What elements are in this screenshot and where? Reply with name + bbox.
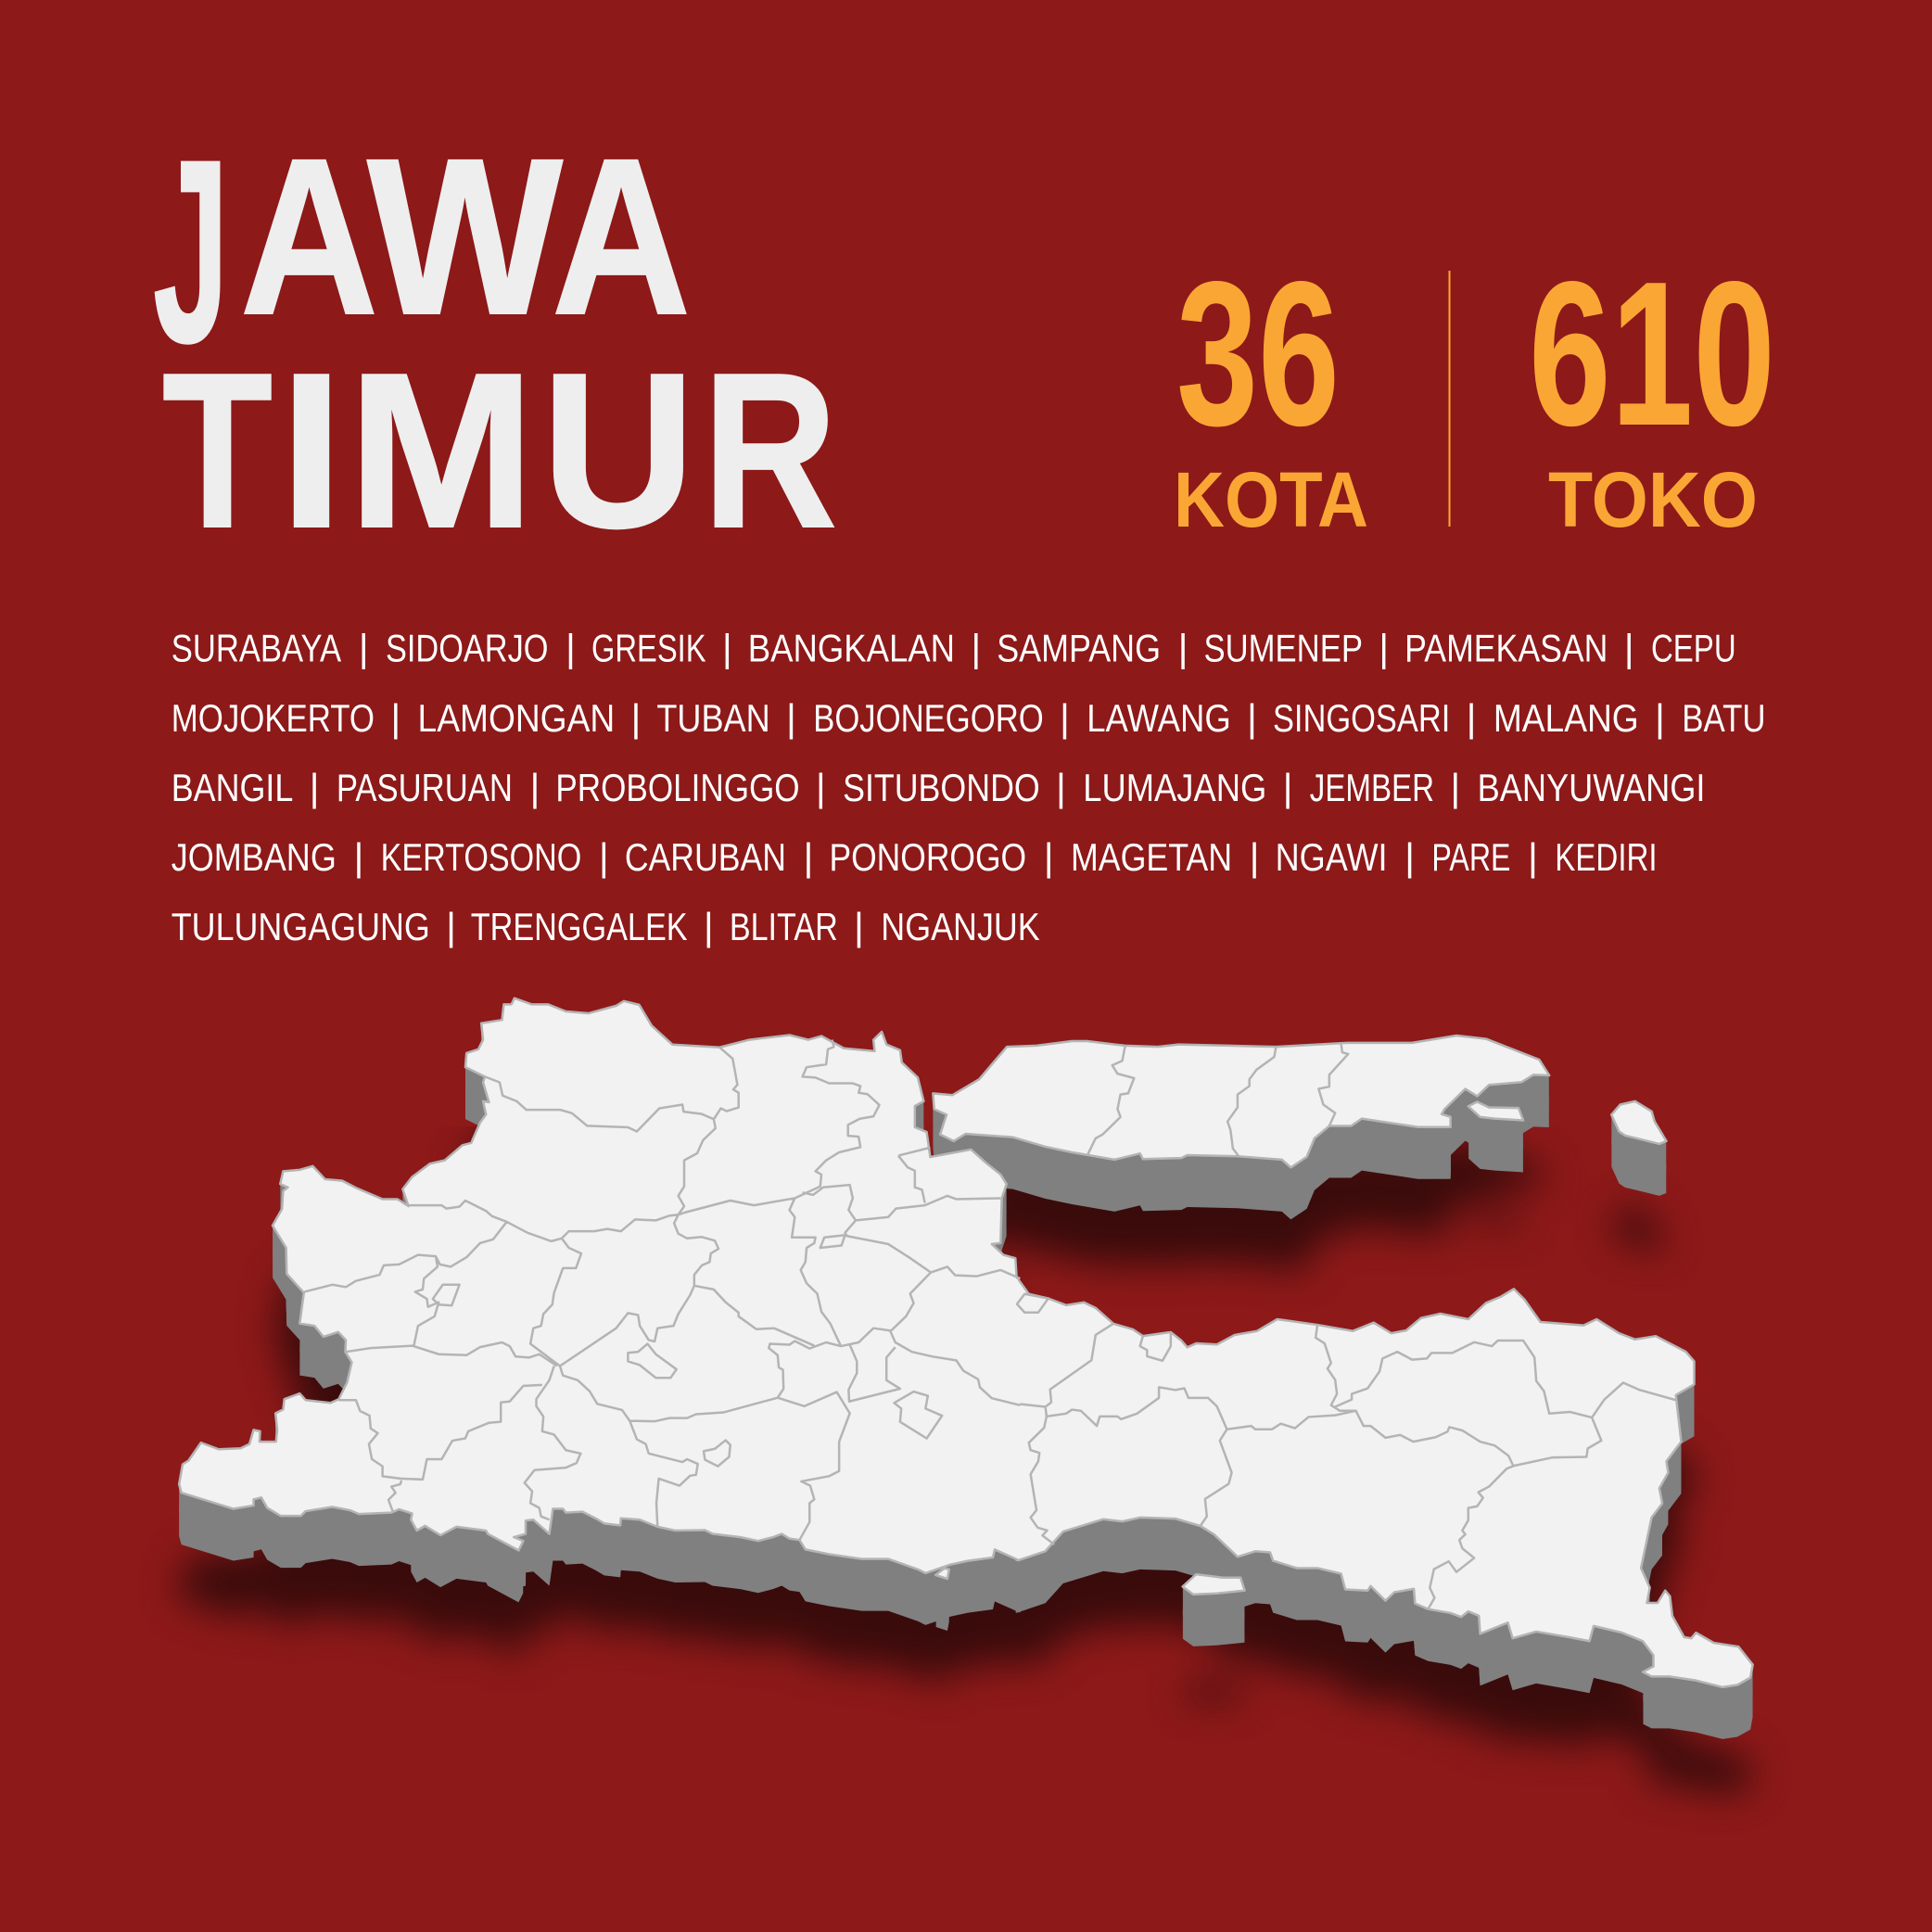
stat: 36 kota: KOTA	[1174, 456, 1368, 543]
city list	[172, 627, 1766, 948]
city list: PARE	[1431, 835, 1510, 879]
title: JAWA TIMUR: J	[153, 106, 229, 397]
city list: TULUNGAGUNG	[172, 905, 430, 948]
stat: 610 toko: TOKO	[1548, 456, 1758, 543]
city list: |	[446, 905, 456, 948]
city list: SUMENEP	[1204, 627, 1363, 670]
city list: BLITAR	[730, 905, 838, 948]
city list: SINGOSARI	[1273, 696, 1450, 740]
stat: 610 toko: 610	[1529, 239, 1775, 469]
title: JAWA TIMUR: I	[279, 328, 344, 574]
city list: BANGIL	[172, 766, 293, 809]
city list: LAWANG	[1087, 696, 1231, 740]
city list: |	[1250, 835, 1260, 879]
city list: |	[1528, 835, 1538, 879]
city list: TUBAN	[656, 696, 770, 740]
city list: BATU	[1682, 696, 1766, 740]
city list: NGAWI	[1276, 835, 1388, 879]
city list: JEMBER	[1310, 766, 1434, 809]
city list: SIDOARJO	[386, 627, 548, 670]
regency borders	[304, 1040, 1676, 1609]
title: JAWA TIMUR: A	[552, 112, 691, 361]
city list: |	[1450, 766, 1460, 809]
city list: NGANJUK	[881, 905, 1040, 948]
map: East Java 3D	[179, 998, 1753, 1794]
city list: |	[1624, 627, 1634, 670]
city list: BANYUWANGI	[1478, 766, 1705, 809]
city list: PROBOLINGGO	[555, 766, 800, 809]
city list: SITUBONDO	[843, 766, 1040, 809]
city list: |	[722, 627, 732, 670]
title: JAWA TIMUR	[153, 106, 837, 574]
city list: BANGKALAN	[748, 627, 955, 670]
city list: KEDIRI	[1555, 835, 1658, 879]
city list: |	[1178, 627, 1188, 670]
infographic canvas	[154, 159, 1769, 1814]
title: JAWA TIMUR: T	[162, 328, 273, 574]
map top surface	[179, 998, 1753, 1687]
map extruded side	[179, 998, 1753, 1687]
city list: |	[816, 766, 826, 809]
city list: |	[804, 835, 813, 879]
title: JAWA TIMUR: R	[703, 328, 837, 574]
city list: |	[1467, 696, 1477, 740]
city list: |	[1283, 766, 1292, 809]
city list: |	[786, 696, 796, 740]
city list: |	[971, 627, 981, 670]
city list: LAMONGAN	[418, 696, 615, 740]
title: JAWA TIMUR: U	[541, 328, 695, 574]
city list: |	[390, 696, 400, 740]
city list: PAMEKASAN	[1405, 627, 1608, 670]
city list: CEPU	[1651, 627, 1736, 670]
city list: |	[1379, 627, 1389, 670]
city list: |	[1056, 766, 1066, 809]
stat divider	[1448, 271, 1450, 527]
city list: |	[566, 627, 576, 670]
title: JAWA TIMUR: A	[240, 112, 378, 361]
city list: |	[1655, 696, 1665, 740]
city list: |	[1044, 835, 1054, 879]
city list: |	[1405, 835, 1415, 879]
city list: |	[530, 766, 540, 809]
city list: JOMBANG	[172, 835, 337, 879]
stat: 36 kota	[1174, 239, 1368, 543]
city list: |	[353, 835, 363, 879]
city list: KERTOSONO	[381, 835, 581, 879]
city list: MOJOKERTO	[172, 696, 375, 740]
city list: |	[359, 627, 369, 670]
city list: PASURUAN	[337, 766, 513, 809]
city list: LUMAJANG	[1083, 766, 1266, 809]
city list: BOJONEGORO	[813, 696, 1044, 740]
city list: |	[599, 835, 609, 879]
city list: MALANG	[1493, 696, 1639, 740]
map shadow	[179, 1105, 1753, 1794]
city list: CARUBAN	[625, 835, 786, 879]
city list: |	[1060, 696, 1070, 740]
map coastline	[179, 998, 1753, 1687]
title: JAWA TIMUR: M	[348, 328, 535, 574]
city list: |	[854, 905, 864, 948]
stat: 36 kota: 36	[1176, 239, 1340, 469]
city list: |	[630, 696, 641, 740]
city list: PONOROGO	[829, 835, 1026, 879]
title: JAWA TIMUR: W	[367, 112, 563, 361]
city list: GRESIK	[591, 627, 706, 670]
city list: |	[310, 766, 320, 809]
city list: SAMPANG	[997, 627, 1161, 670]
city list: |	[1247, 696, 1257, 740]
city list: |	[704, 905, 714, 948]
city list: SURABAYA	[172, 627, 341, 670]
city list: MAGETAN	[1071, 835, 1232, 879]
city list: TRENGGALEK	[471, 905, 688, 948]
stat: 610 toko	[1529, 239, 1775, 543]
